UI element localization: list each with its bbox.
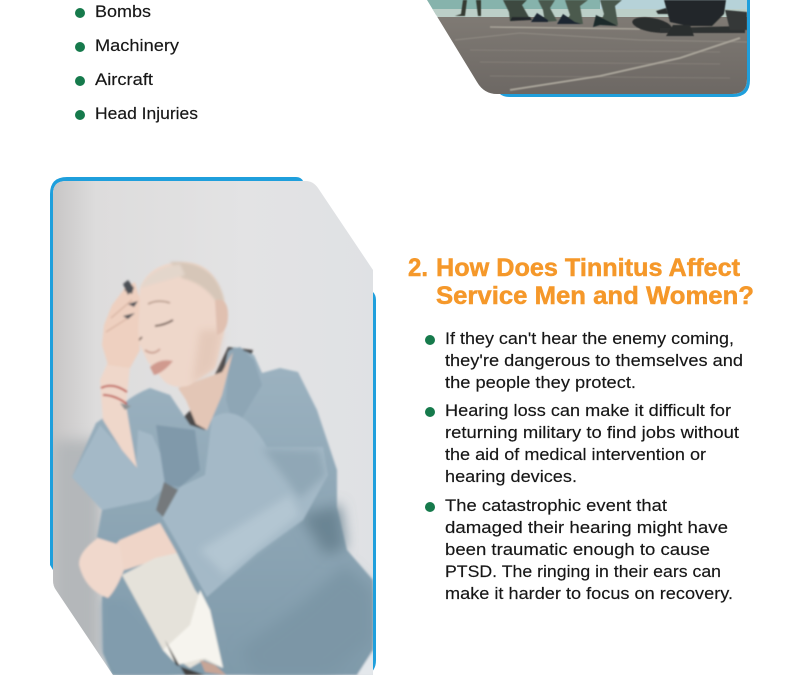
text block: effects on service members: [425, 330, 743, 603]
heading: section 2: Service Men and Women?: [436, 282, 754, 310]
heading: section 2: 2.: [408, 254, 428, 282]
bullet 3: PTSD: been traumatic enough to cause: [445, 541, 710, 559]
bullet 2: jobs: Hearing loss can make it difficult for: [445, 402, 732, 420]
bullet 2: jobs: hearing devices.: [445, 468, 577, 486]
bullet 3: PTSD: make it harder to focus on recovery.: [445, 585, 733, 603]
bullet 1: safety: If they can't hear the enemy coming,: [445, 330, 734, 348]
bullet 2: jobs: returning military to find jobs without: [445, 424, 739, 442]
panel: soldiers photo: [420, 0, 755, 97]
photo: woman holding her head: [50, 178, 376, 675]
list item: Machinery: Machinery: [95, 37, 180, 55]
bullet 2: jobs: the aid of medical intervention or: [445, 446, 707, 464]
bullet 1: safety: they're dangerous to themselves and: [445, 352, 743, 370]
bullet 3: PTSD: The catastrophic event that: [445, 497, 667, 515]
heading: section 2: [408, 254, 754, 310]
bullet 1: safety: [425, 330, 743, 392]
bullet 3: PTSD: [425, 497, 733, 603]
list item: Head Injuries: Head Injuries: [95, 105, 198, 123]
panel: woman photo: [50, 177, 376, 675]
blue frame: soldiers photo: [500, 0, 750, 97]
list item: Bombs: Bombs: [95, 3, 151, 21]
photo: soldiers on tarmac: [420, 0, 755, 97]
bullet 2: jobs: [425, 402, 739, 486]
list item: Aircraft: Aircraft: [95, 71, 153, 89]
bullet 3: PTSD: damaged their hearing might have: [445, 519, 728, 537]
list: causes of hearing damage: [75, 3, 198, 123]
blue frame: woman photo: [50, 177, 376, 675]
bullet 3: PTSD: PTSD. The ringing in their ears can: [445, 563, 721, 581]
bullet 1: safety: the people they protect.: [445, 374, 636, 392]
heading: section 2: How Does Tinnitus Affect: [436, 254, 741, 282]
